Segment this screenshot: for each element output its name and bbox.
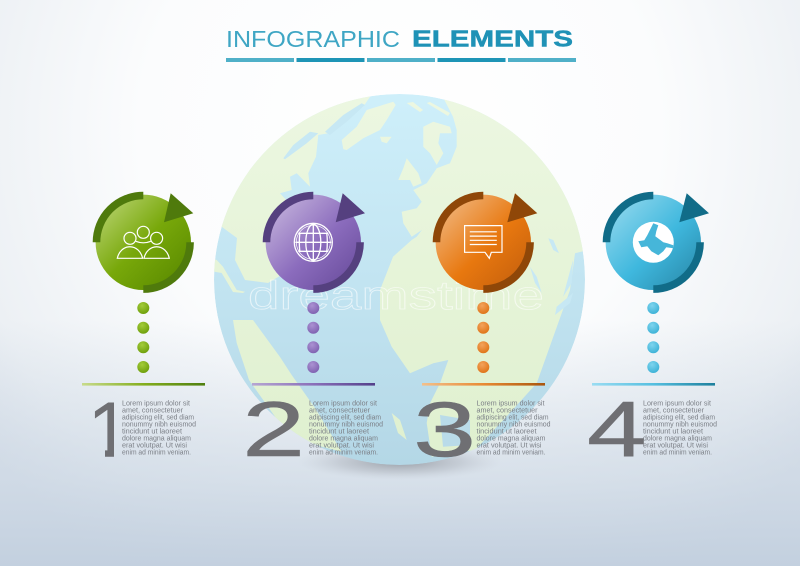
Indian coast streak <box>563 260 573 296</box>
text block 4: nonummy nibh euismod <box>643 422 717 428</box>
disc and ring 1 <box>96 193 193 290</box>
text block 4 <box>643 400 717 456</box>
text block 2: nonummy nibh euismod <box>309 422 383 428</box>
southern inlet <box>440 415 470 447</box>
disc and ring 4 <box>606 193 709 290</box>
rule 4 <box>592 383 715 386</box>
text block 1 <box>122 400 196 456</box>
North America <box>222 96 370 283</box>
text block 3: tincidunt ut laoreet <box>476 428 537 436</box>
text block 3: erat volutpat. Ut wisi <box>476 442 542 450</box>
text block 4: dolore magna aliquam <box>643 436 712 442</box>
panel: step 3 orange <box>422 193 545 386</box>
text block 3: dolore magna aliquam <box>476 436 546 442</box>
text block 4: tincidunt ut laoreet <box>643 428 703 436</box>
disc and ring 3 <box>436 193 537 290</box>
icon: earth <box>633 222 674 263</box>
small island <box>392 413 407 440</box>
Hudson Bay <box>283 132 318 159</box>
text block 4: adipiscing elit, sed diam <box>643 414 715 422</box>
text block 2: enim ad minim veniam. <box>309 450 378 456</box>
dots 2 <box>307 302 319 373</box>
text block 1: adipiscing elit, sed diam <box>122 414 194 422</box>
icon: grid globe <box>294 223 332 261</box>
watermark: dreamstime <box>248 274 544 318</box>
text block 3: Lorem ipsum dolor sit <box>476 400 545 408</box>
text block 4: erat volutpat. Ut wisi <box>643 442 708 450</box>
United Kingdom <box>398 158 422 187</box>
rule 1 <box>82 383 205 386</box>
text block 2: Lorem ipsum dolor sit <box>309 400 377 408</box>
text block 1: nonummy nibh euismod <box>122 422 196 428</box>
text block 1: dolore magna aliquam <box>122 436 191 442</box>
text block 2: amet, consectetuer <box>309 408 371 414</box>
numeral 3: 3 <box>413 386 476 473</box>
icon: speech bubble <box>465 226 502 258</box>
globe with world map <box>214 94 585 465</box>
text block 3 <box>476 400 551 456</box>
Red Sea <box>548 238 559 253</box>
rule 2 <box>252 383 375 386</box>
panel: step 4 blue <box>592 193 715 386</box>
text block 4: Lorem ipsum dolor sit <box>643 400 711 408</box>
dots 4 <box>647 302 659 373</box>
dots 3 <box>477 302 489 373</box>
Iceland <box>380 137 392 143</box>
text block 3: enim ad minim veniam. <box>476 450 546 456</box>
text block 2: erat volutpat. Ut wisi <box>309 442 374 450</box>
lake <box>530 267 542 293</box>
text block 4: enim ad minim veniam. <box>643 450 712 456</box>
text block 1: enim ad minim veniam. <box>122 450 191 456</box>
title underline bars <box>226 58 576 62</box>
Eurasia and Africa <box>380 100 583 457</box>
Scandinavia <box>423 122 452 165</box>
globe shadow <box>298 444 502 480</box>
text block 2: tincidunt ut laoreet <box>309 428 369 436</box>
icon: people <box>117 226 169 258</box>
arctic channel <box>325 103 365 135</box>
title: INFOGRAPHIC <box>226 26 400 52</box>
panel: step 1 green <box>82 193 205 386</box>
text block 3: nonummy nibh euismod <box>476 422 551 428</box>
South America <box>233 320 342 452</box>
text block 3: adipiscing elit, sed diam <box>476 414 549 422</box>
text block 2: dolore magna aliquam <box>309 436 378 442</box>
rule 3 <box>422 383 545 386</box>
text block 1: erat volutpat. Ut wisi <box>122 442 187 450</box>
Central America <box>214 260 245 293</box>
eastern channel <box>555 298 567 315</box>
text block 1: tincidunt ut laoreet <box>122 428 182 436</box>
numeral 4: 4 <box>587 386 647 473</box>
watermark <box>248 255 544 318</box>
text block 2 <box>309 400 383 456</box>
text block 1: Lorem ipsum dolor sit <box>122 400 190 408</box>
arctic islands <box>407 102 423 112</box>
Greenland <box>342 102 396 150</box>
text block 2: adipiscing elit, sed diam <box>309 414 381 422</box>
panel: step 2 purple <box>252 193 375 386</box>
title <box>226 26 573 52</box>
dots 1 <box>137 302 149 373</box>
disc and ring 2 <box>266 193 365 290</box>
text block 3: amet, consectetuer <box>476 408 538 414</box>
title: ELEMENTS <box>412 26 573 52</box>
text block 4: amet, consectetuer <box>643 408 705 414</box>
numeral 1: 1 <box>88 385 132 473</box>
numeral 2: 2 <box>242 386 305 473</box>
text block 1: amet, consectetuer <box>122 408 184 414</box>
